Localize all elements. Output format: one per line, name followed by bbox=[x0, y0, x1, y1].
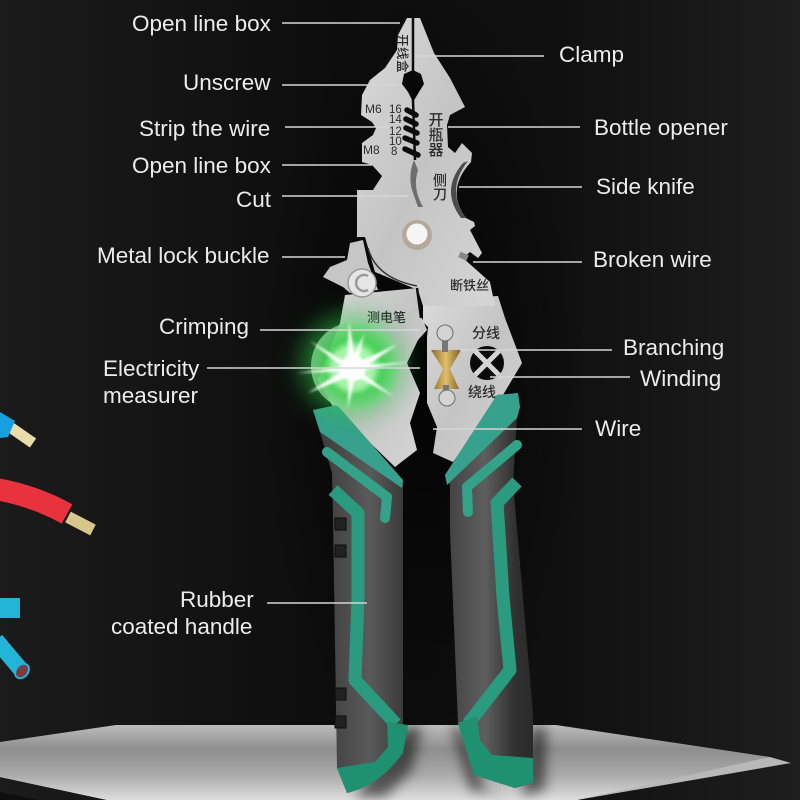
callout: Clamp: Clamp bbox=[559, 42, 624, 67]
branching hole bbox=[470, 346, 504, 380]
text: M8: M8 bbox=[363, 143, 380, 157]
pliers bbox=[313, 18, 533, 793]
wire strip notches bbox=[405, 110, 418, 155]
text: bottle opener: 开瓶器 bbox=[426, 112, 444, 157]
cyan wire lower bbox=[0, 640, 32, 681]
text: broken wire: 断铁丝 bbox=[450, 278, 489, 293]
text: test pen: 测电笔 bbox=[367, 310, 406, 325]
callout: Electricity measurer: Electricity bbox=[103, 356, 200, 381]
brass connector bbox=[431, 325, 461, 406]
text: M6: M6 bbox=[365, 102, 382, 116]
lock arc line bbox=[368, 248, 417, 286]
tool text bbox=[363, 34, 500, 400]
callout: Metal lock buckle: Metal lock buckle bbox=[97, 243, 270, 268]
side knife bbox=[451, 161, 468, 218]
left handle grips bbox=[335, 518, 346, 728]
callout: Side knife: Side knife bbox=[596, 174, 695, 199]
callout: Electricity measurer bbox=[103, 356, 420, 408]
callout: Rubber coated handle: Rubber bbox=[180, 587, 254, 612]
right handle green cap bbox=[458, 716, 533, 788]
text: gauge numbers: 16 bbox=[389, 104, 402, 116]
floor surface bbox=[0, 725, 791, 800]
unscrew hole bbox=[402, 70, 424, 102]
lower-right jaw bbox=[423, 296, 522, 462]
handle shadow on floor bbox=[355, 727, 546, 797]
text: gauge numbers: 12 bbox=[389, 126, 402, 138]
callout: Winding: Winding bbox=[640, 366, 721, 391]
text: open line box: 开线盒 bbox=[395, 34, 410, 73]
blue wire bbox=[0, 412, 33, 443]
handle right bbox=[445, 393, 533, 788]
callout: Open line box top: Open line box bbox=[132, 11, 272, 36]
left handle green cap bbox=[337, 722, 408, 793]
text: branching: 分线 bbox=[472, 325, 500, 341]
text: gauge numbers: 14 bbox=[389, 114, 402, 126]
text: gauge numbers: 8 bbox=[391, 146, 397, 158]
wire notch bbox=[458, 252, 469, 261]
lock buckle bbox=[323, 240, 378, 293]
lower-left jaw bbox=[318, 288, 427, 467]
callout: Rubber coated handle: coated handle bbox=[111, 614, 252, 639]
text: gauge numbers: 10 bbox=[389, 136, 402, 148]
central pivot rivet bbox=[402, 220, 432, 250]
right handle green trim bbox=[445, 393, 520, 724]
red wire bbox=[0, 489, 93, 530]
green light glow bbox=[286, 299, 418, 431]
jaw slits bbox=[413, 18, 421, 318]
callout: Electricity measurer: measurer bbox=[103, 383, 199, 408]
wires on the left bbox=[0, 412, 93, 681]
lock buckle rivet bbox=[348, 269, 376, 297]
callout: Unscrew: Unscrew bbox=[183, 70, 271, 95]
callout: Open line box lower: Open line box bbox=[132, 153, 272, 178]
callout: Crimping: Crimping bbox=[159, 314, 249, 339]
callout: Rubber coated handle bbox=[111, 587, 367, 639]
callout: Broken wire: Broken wire bbox=[593, 247, 712, 272]
text: winding: 绕线 bbox=[468, 384, 496, 400]
callout: Bottle opener: Bottle opener bbox=[594, 115, 728, 140]
left handle green trim bbox=[313, 405, 403, 724]
callout: Cut: Cut bbox=[236, 187, 272, 212]
handle left bbox=[313, 405, 408, 793]
cutting edge bbox=[410, 160, 423, 207]
callout: Strip the wire: Strip the wire bbox=[139, 116, 270, 141]
cyan wire upper bbox=[0, 598, 20, 618]
text: side knife: 侧刀 bbox=[432, 173, 448, 202]
callout: Wire: Wire bbox=[595, 416, 641, 441]
upper blades and pivot head bbox=[357, 18, 495, 306]
callout: Branching: Branching bbox=[623, 335, 724, 360]
tool shadow bbox=[260, 0, 590, 780]
text: gauge numbers bbox=[389, 104, 402, 158]
